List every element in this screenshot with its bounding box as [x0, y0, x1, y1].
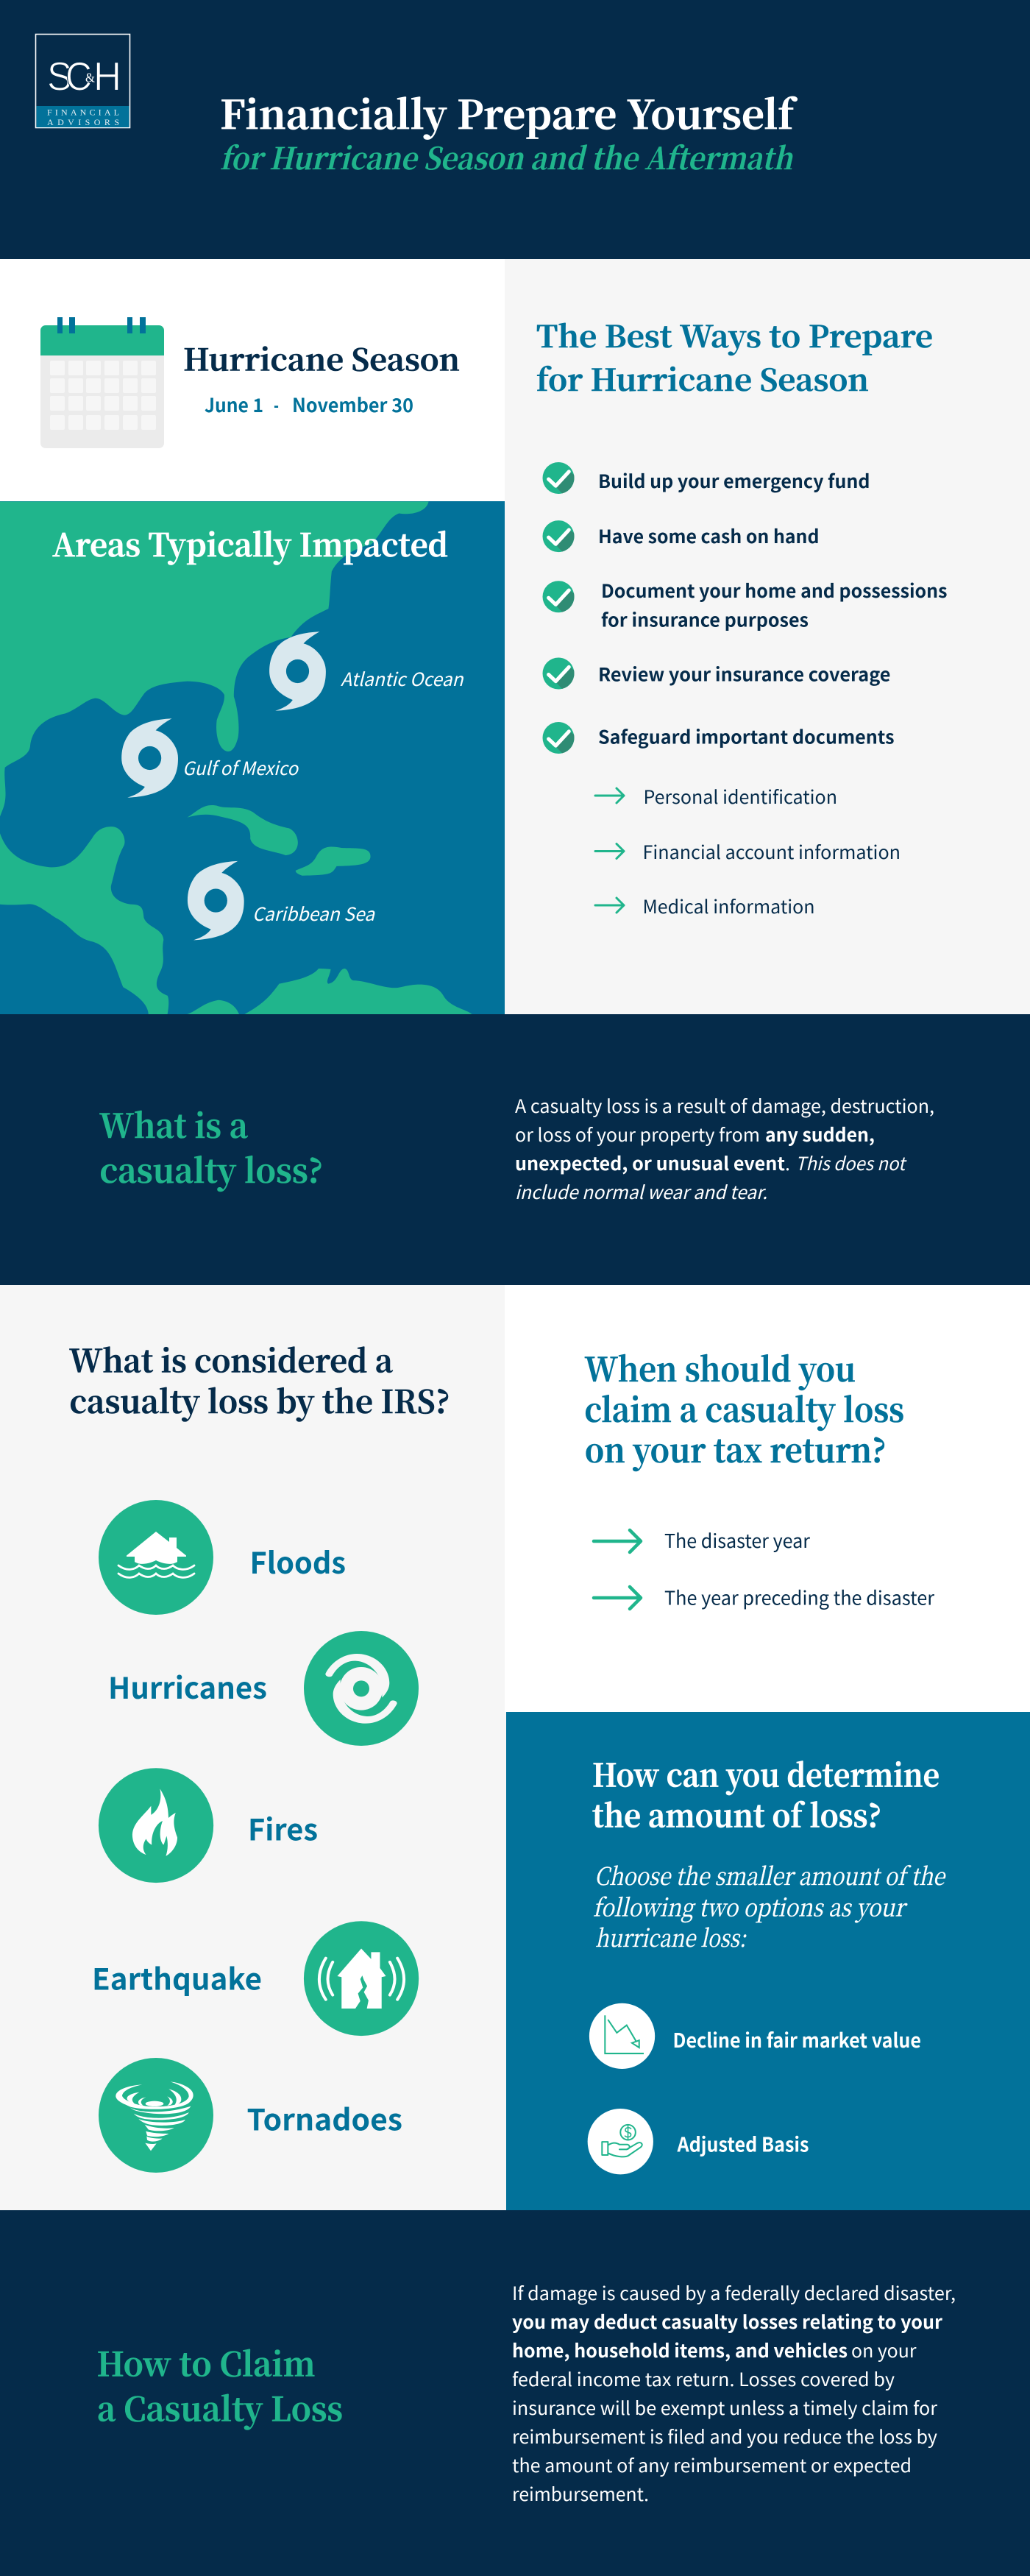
sub item: personal identification: Personal identification: [643, 783, 837, 810]
heading: how to claim: a Casualty Loss: [97, 2383, 343, 2430]
text block: how to claim details: insurance will be exempt unless a timely claim for: [512, 2394, 937, 2421]
heading: determine amount of loss: the amount of loss?: [592, 1791, 881, 1837]
list item: document home: [601, 577, 948, 633]
logo: SC&H Financial Advisors: FINANCIAL: [47, 107, 119, 118]
panel: how to claim: [0, 2210, 1030, 2576]
label: floods: Floods: [250, 1540, 346, 1582]
icon: calendar: [40, 317, 164, 448]
option: disaster year: The disaster year: [664, 1526, 811, 1554]
icon: hurricane Atlantic: [269, 631, 326, 711]
heading: how to claim: [97, 2338, 343, 2430]
list item: document home: Document your home and possessions: [601, 577, 948, 604]
icon: tornado: [99, 2058, 213, 2173]
sub item: medical information: Medical information: [643, 893, 815, 919]
list item: cash on hand: Have some cash on hand: [598, 523, 820, 549]
icon: check 5: [543, 722, 574, 754]
dates: June 1: [205, 391, 263, 418]
list item: safeguard documents: Safeguard important documents: [598, 723, 895, 750]
logo: SC&H Financial Advisors: [35, 34, 129, 128]
text block: casualty loss definition: [515, 1092, 934, 1205]
list item: insurance coverage: Review your insurance coverage: [598, 661, 890, 687]
arrow: preceding year: [594, 1587, 641, 1609]
text block: casualty loss definition: include normal wear and tear.: [515, 1178, 767, 1205]
text block: casualty loss definition: unexpected, or unusual event: [515, 1150, 785, 1176]
panel: what is considered a casualty loss: [0, 1285, 506, 2210]
text block: casualty loss definition: or loss of your property from: [515, 1121, 760, 1147]
panel: hurricane season dates: [0, 259, 505, 502]
dates: [205, 391, 413, 418]
heading: considered by the IRS: [69, 1337, 450, 1423]
text block: how to claim details: reimbursement.: [512, 2480, 649, 2507]
text block: casualty loss definition: This does not: [795, 1150, 907, 1176]
arrow: financial account: [595, 843, 624, 858]
text block: how to claim details: federal income tax return. Losses covered by: [512, 2366, 895, 2392]
icon: declining chart: [589, 2003, 655, 2069]
panel: amount of loss: [506, 1712, 1030, 2210]
icon: check 4: [543, 658, 574, 689]
text block: choose the smaller amount: Choose the smaller amount of the: [594, 1858, 947, 1892]
text block: how to claim details: home, household items, and vehicles: [512, 2337, 848, 2363]
logo: SC&H Financial Advisors: C: [65, 53, 92, 99]
heading: when should you claim: When should you: [584, 1343, 856, 1391]
dates: November 30: [292, 391, 413, 418]
icon: earthquake house: [304, 1921, 419, 2036]
label: tornadoes: Tornadoes: [247, 2096, 402, 2139]
text block: how to claim details: the amount of any reimbursement or expected: [512, 2452, 912, 2478]
list item: emergency fund: Build up your emergency fund: [598, 467, 870, 494]
panel: what is a casualty loss: [0, 1014, 1030, 1285]
dates: -: [274, 391, 279, 418]
icon: hurricane Gulf: [121, 718, 178, 798]
text block: casualty loss definition: A casualty loss is a result of damage, destruction,: [515, 1092, 934, 1119]
heading: considered by the IRS: casualty loss by the IRS?: [69, 1378, 450, 1423]
heading: when should you claim: claim a casualty loss: [584, 1384, 904, 1432]
arrow: personal identification: [595, 788, 624, 803]
panel: best ways to prepare: [505, 259, 1030, 1014]
map: land masses: [0, 501, 472, 1014]
logo: SC&H Financial Advisors: &: [85, 71, 95, 85]
heading: determine amount of loss: How can you determine: [592, 1752, 940, 1796]
icon: hurricane swirl: [304, 1631, 419, 1746]
heading: best ways to prepare: for Hurricane Season: [536, 356, 869, 400]
logo: SC&H Financial Advisors: S: [47, 53, 72, 99]
text block: casualty loss definition: any sudden,: [765, 1121, 875, 1147]
list item: document home: for insurance purposes: [601, 606, 809, 633]
panel: when to claim: [505, 1285, 1030, 1712]
text block: how to claim details: on your: [851, 2337, 917, 2363]
logo: SC&H Financial Advisors: H: [93, 53, 121, 99]
icon: check 3: [543, 581, 574, 612]
label: fires: Fires: [248, 1807, 318, 1850]
icon: hurricane Caribbean: [188, 861, 244, 940]
subtitle: for Hurricane Season and the Aftermath: [220, 135, 794, 178]
arrow: medical information: [595, 898, 624, 913]
heading: how to claim: How to Claim: [97, 2338, 315, 2386]
icon: check 1: [543, 462, 574, 494]
heading: determine amount of loss: [592, 1752, 940, 1837]
label: hurricanes: Hurricanes: [108, 1665, 267, 1708]
text block: choose the smaller amount: hurricane loss:: [595, 1919, 747, 1954]
label: adjusted basis: Adjusted Basis: [677, 2129, 809, 2158]
icon: hand with coin: [588, 2109, 653, 2174]
arrow: disaster year: [594, 1530, 641, 1552]
text block: casualty loss definition: .: [785, 1150, 790, 1176]
heading: what is a casualty loss: [99, 1100, 323, 1192]
logo: SC&H Financial Advisors: ADVISORS: [47, 117, 119, 127]
heading: best ways to prepare: [536, 313, 933, 400]
heading: when should you claim: on your tax return?: [585, 1424, 886, 1472]
label: Caribbean Sea: Caribbean Sea: [252, 900, 376, 927]
option: preceding year: The year preceding the disaster: [664, 1584, 935, 1610]
text block: how to claim details: If damage is caused by a federally declared disaster,: [512, 2279, 956, 2306]
text block: how to claim details: [512, 2279, 956, 2507]
heading: considered by the IRS: What is considered a: [69, 1337, 394, 1382]
sub item: financial account information: Financial account information: [643, 838, 901, 865]
heading: when should you claim: [584, 1343, 904, 1472]
heading: best ways to prepare: The Best Ways to Prepare: [536, 313, 933, 356]
text block: how to claim details: you may deduct casualty losses relating to your: [512, 2308, 942, 2335]
panel: areas typically impacted map: [0, 501, 505, 1014]
heading: what is a casualty loss: casualty loss?: [100, 1144, 323, 1192]
heading: hurricane season: Hurricane Season: [183, 336, 460, 380]
text block: choose the smaller amount: following two options as your: [593, 1889, 908, 1924]
label: earthquake: Earthquake: [92, 1956, 262, 1999]
heading: what is a casualty loss: What is a: [99, 1100, 249, 1147]
panel: header: [0, 0, 1030, 259]
icon: fire: [99, 1768, 213, 1883]
label: Gulf of Mexico: Gulf of Mexico: [182, 754, 299, 781]
icon: check 2: [543, 520, 574, 552]
label: decline in fair market value: Decline in fair market value: [672, 2025, 921, 2053]
label: Atlantic Ocean: Atlantic Ocean: [341, 665, 464, 692]
text block: choose the smaller amount: [593, 1858, 947, 1954]
text block: how to claim details: reimbursement is filed and you reduce the loss by: [512, 2423, 937, 2449]
title: Financially Prepare Yourself: [220, 85, 798, 141]
icon: flood: [99, 1500, 213, 1615]
heading: areas typically impacted: Areas Typically Impacted: [52, 521, 448, 566]
